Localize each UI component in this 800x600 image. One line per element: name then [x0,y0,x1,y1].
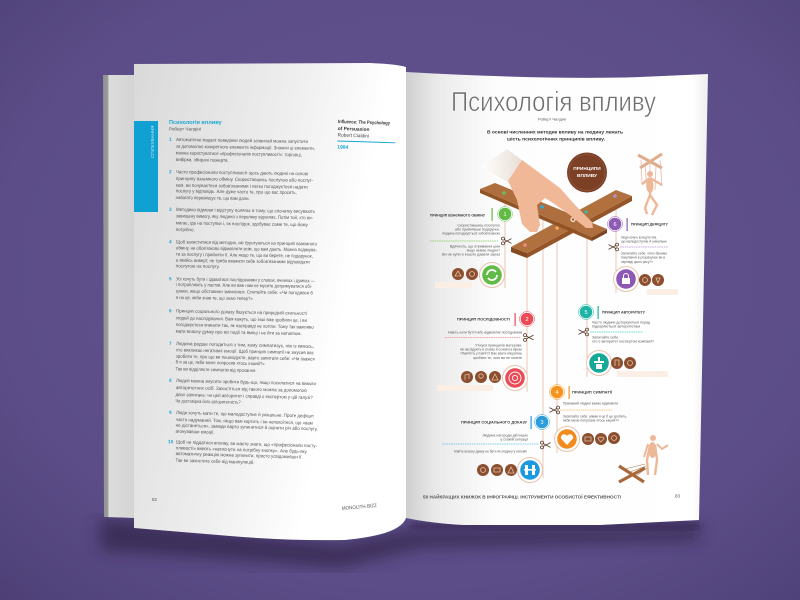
principle 2: consistency: ПРИНЦИП ПОСЛІДОВНОСТІ [457,318,510,322]
principle 2: consistency [437,312,534,391]
principle 4: liking: 4 [555,390,559,396]
principle 4: liking: якби мене попросив хтось інший?» [563,418,619,422]
principle 4: liking [550,384,627,452]
side tab: СПІЛКУВАННЯ [150,126,155,158]
principle 3: social proof: у схожій ситуації [500,438,528,442]
takeaway 9 [168,409,318,437]
bar two [511,190,632,258]
book shadow [100,518,700,568]
principle 5: authority [578,304,668,377]
principle 3: social proof: Майте власну думку не бути як людину у натовпі [454,450,527,454]
takeaway 8: двох запитань: чи цей авторитет і справді є експертом у цій галузі? [176,391,313,400]
takeaway 5: я на це, якби знав те, що знаю тепер?» [176,295,253,301]
takeaway 5: і потрапляють у пастки. Але ви вже нам не мусите дотримуватися обі- [176,282,312,289]
takeaway 1: 1 [169,137,172,142]
subtitle [487,130,623,142]
takeaway 8 [169,377,316,407]
principle 1: reciprocity: 1 [503,212,507,218]
takeaway 5: 5 [169,276,172,281]
left page [134,63,406,540]
takeaway 4 [169,238,317,270]
takeaway 4: обміну, не обов'язково відмовляти всім, що вам дають. Можна подякува- [176,245,317,252]
center badge: principles [567,152,607,192]
left page footer: 82 [152,497,158,502]
principle 6: scarcity: Запитайте себе: чітко бачимо [621,252,667,256]
wooden figure with fallen cross [619,435,668,482]
takeaway 4: ти за послугу і прийняти її. Але якщо те, що ви берете, не подарунок, [176,251,313,259]
center badge: principles: ПРИНЦИПИ [573,166,601,172]
takeaway 1: Автоматичні моделі поведінки людей зазвичай можна запустити [176,136,308,144]
takeaway 2: послугу у відповідь. Але дуже часто те, про що вас просять, [176,188,297,195]
principle 1: reciprocity: якщо немає людно? [466,248,500,252]
takeaway 2: принципу взаємного обміну. Скориставшись послугою або послуг- [176,176,313,183]
wooden cross [480,183,632,258]
takeaway 10: пливості» вміють «натиснути на потрібну кнопку». Але будь-яку [176,445,308,454]
takeaway 9: агонувавши емоції. [175,429,215,435]
principle 4: liking: Приємний людині важко відмовити [563,402,618,406]
takeaway 2: набагато перевищує те, що вам дали. [176,195,250,201]
takeaway 6: 6 [169,308,172,313]
takeaway 3: потрібно. [176,227,195,232]
strings [505,195,616,478]
principle 5: authority: підкоряються авторитетам [592,324,641,328]
takeaway 9: 9 [169,410,172,415]
bar one [480,183,607,241]
principle 5: authority: Запитайте себе: [592,336,619,340]
principle 4: liking: Запитайте себе: уявив я це б це зробить, [563,414,627,418]
subtitle: В основі численних методик впливу на людину лежать [487,130,623,134]
takeaway 3: магає, іде на поступки і, як наслідок, здобуває саме те, що йому [176,219,308,227]
principle 3: social proof: ПРИНЦИП СОЦІАЛЬНОГО ДОКАЗУ [461,420,528,424]
principle 2: consistency: 2 [525,317,529,323]
center badge: principles: ВПЛИВУ [577,173,598,179]
principle 5: authority: 5 [584,310,588,316]
takeaway 8: Чи достовірна його авторитетність? [176,397,241,405]
side tab [134,121,158,212]
under page left [103,75,135,518]
takeaway 5: цянки, якщо обставини змінилися. Спитайте себе: «Чи погодився б [176,287,313,295]
takeaway 5: Усі хочуть бути і здаватися послідовними у словах, вчинках і думках — [176,276,315,283]
takeaway 10: Так ви захистите себе від маніпуляцій. [175,457,255,465]
peg dots [502,191,617,247]
takeaway 3: завищену вимогу, яку людина з переляку відхиляє. Потім той, хто ви- [176,212,313,220]
author: Роберт Чалдіні [538,116,566,122]
takeaway 3 [169,207,316,234]
right page footer: 50 НАЙКРАЩИХ КНИЖОК В ІНФОГРАФІЦІ. ІНСТРУМЕНТИ ОСОБИСТОЇ ЕФЕКТИВНОСТІ [423,492,621,500]
principle 2: consistency: Навіть коли буття або відмовляє послідовним [448,330,523,334]
takeaway 3: Методика відмови і відступу полягає в тому, що спочатку висувають [176,207,316,214]
hand [480,149,593,232]
takeaway 7: хто викликає негативні емоції. Щоб принцип симпатії не змусив вас [176,347,315,355]
original title note: of Persuasion [338,126,370,133]
takeaway 9: часто надуманий. Тож, якщо вам кортить і ви непокоїтеся, що «вам [176,416,313,426]
takeaway 7: 7 [169,341,172,346]
takeaway 4: Щоб захиститися від методик, які ґрунтуються на принципі взаємного [176,238,317,246]
left page footer: MONOLITH BIZZ [342,503,377,512]
takeaway 4: 4 [169,239,172,244]
takeaway 5 [169,276,315,302]
takeaway 10: 10 [168,439,174,444]
principle 5: authority: хто є авторитет експертом компанії? [592,340,654,344]
original title note: 1984 [337,144,349,151]
right page [406,72,708,525]
principle 1: reciprocity: або прийнявши подарунок, [455,228,500,232]
principle 2: consistency: зробити те, чого ви не хочете [473,356,522,360]
principle 6: scarcity: Люди хочуть володіти тим, [621,236,657,240]
principle 2: consistency: які наслідують в словах й основні в вірках [460,348,522,352]
right page footer [423,492,681,500]
takeaway 9: не дістанеться», завжди варто зупинитися й оцінити річ або послугу, [176,422,318,431]
book heading: Роберт Чалдіні [169,126,201,132]
subtitle: шість психологічних принципів впливу. [507,136,605,142]
principle 6: scarcity: 6 [613,222,617,228]
takeaway 6: людей до наслідування. Вам кажуть, що інші вже зробили це, і ви [176,314,307,323]
principle 2: consistency: Утіхуся принципів матеріям, [475,344,522,348]
takeaway 8: 8 [169,378,172,383]
book heading: Психологія впливу [169,120,223,126]
takeaway 1: за допомогою конкретного елемента інформації. Знаючи ці елементи, [176,144,315,151]
principle 1: reciprocity: людина погоджується зобов'язаною [442,232,500,236]
original title note: Influence: The Psychology [338,119,390,127]
right page footer: 83 [675,494,681,498]
principle 1: reciprocity: Скориставшись послугою [457,224,500,228]
principle 1: reciprocity [430,206,512,288]
principle 4: liking: ПРИНЦИП СИМПАТІЇ [572,390,613,394]
takeaway 10: Щоб не піддатися впливу, ви маєте знати, що «професіонали посту- [176,439,317,448]
takeaway 1: вибірки, збирачі пожертв. [176,157,229,163]
takeaway 1: можна користуватися «професіоналів поступливості»: торговці, [176,150,302,157]
takeaway 7: Так ви відділяєте симпатію від прохання. [175,366,257,373]
takeaway 7: зробити те, про що ви пошкодуєте, варто запитати себе: «Чи зважся [176,354,315,362]
principle 3: social proof: 3 [540,420,544,426]
principle 6: scarcity: перевіді цього ресу?» [621,260,653,264]
book heading [169,120,223,132]
takeaway 7: б я за це, якби мене попросив хтось інший?» [176,358,265,366]
principle 1: reciprocity: Ви не купи в іншого давати зараз [442,252,500,256]
principle 1: reciprocity: ПРИНЦИП ВЗАЄМНОГО ОБМІНУ [430,214,486,218]
title: Психологія впливу [451,86,656,117]
principle 3: social proof [442,414,550,482]
takeaway 1 [169,136,315,164]
takeaway 9: Люди хочуть мати те, що малодоступне й унікальне. Проте дефіцит [176,409,315,419]
principle 2: consistency: «Пам'ятіть у пам'яті? Вже маєте впоратись [460,352,522,356]
takeaway 10 [167,439,317,467]
takeaway 2: 2 [169,169,172,174]
takeaway 7 [168,341,315,374]
original title note: Robert Cialdini [337,132,369,139]
takeaway 4: послугою на послугу. [176,263,220,269]
principle 5: authority: Часто людини доторкуються порад [592,320,651,324]
takeaway 2: ком, ви почуваєтеся зобов'язаними і легко погоджуєтеся надати [176,183,308,190]
principle 6: scarcity: що малодоступне й унікальне [621,240,667,244]
takeaway 8: авторитетних осіб. Захистіться від такого можна за допомогою [176,385,307,393]
takeaway 7: Людина радше погодиться з тим, кому симпатизує, ніж із кимось, [176,341,314,349]
takeaway 2 [169,169,313,202]
takeaway 2: Часто професіонали поступливості щось дають людині на основі [176,169,308,176]
left page footer [152,497,377,512]
principle 1: reciprocity: Вдячність, що отримання ціни [450,244,500,248]
principle 5: authority: ПРИНЦИП АВТОРИТЕТУ [602,310,646,314]
takeaway 8: Людей можна змусити зробити будь-що, якщо посилатися на вимоги [176,377,316,386]
principle 6: scarcity [608,216,678,295]
takeaway 6: Принцип соціального доказу базується на природній схильності [176,307,307,316]
principle 6: scarcity: покупання в розрахунок ви в [621,256,665,260]
takeaway 4: а якийсь виверт, не треба вважати себе зобов'язаними відповідати [176,257,310,265]
original title note [337,119,396,152]
takeaway 6 [169,307,314,336]
marionette top [638,154,662,215]
principle 3: social proof: Людина нагороди дій інших [482,434,528,438]
principle 6: scarcity: ПРИНЦИП ДЕФІЦИТУ [631,222,669,226]
takeaway 10: автоматичну реакцію можна зупинити, просто усвідомивши її. [176,451,303,460]
takeaway 3: 3 [169,207,172,212]
takeaway 6: мати власну думку про всі події та вміщі і не йти за натовпом. [176,328,302,336]
takeaway 6: погоджуєтеся вчинити так, як насправді не хотіли. Тому так важливо [176,322,314,330]
